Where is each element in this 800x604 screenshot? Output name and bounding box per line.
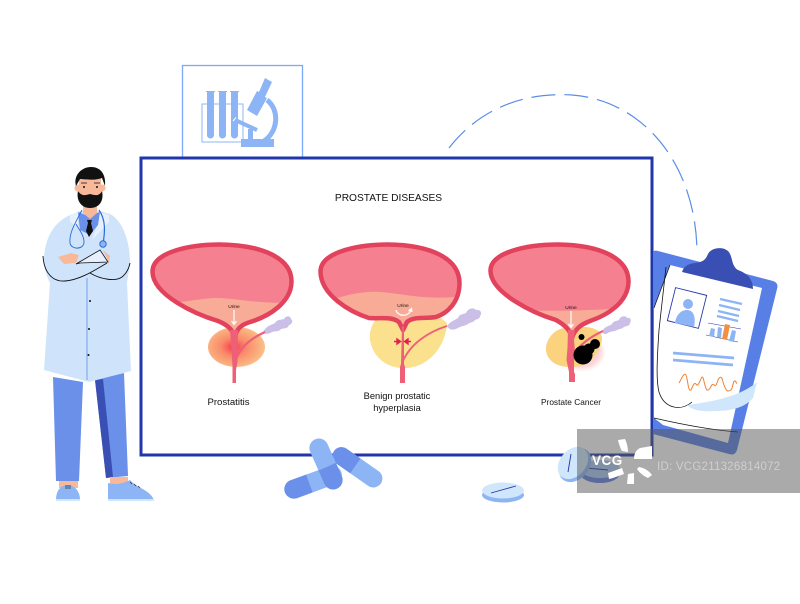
watermark [577, 429, 800, 493]
bladder [152, 244, 292, 338]
bladder [320, 244, 460, 330]
vas deferens smoke [263, 316, 292, 334]
watermark logo [608, 439, 652, 484]
gland [546, 327, 602, 367]
capsule 2 [329, 444, 386, 491]
smoke [447, 308, 481, 330]
urethra [230, 330, 238, 383]
enlarged gland [370, 314, 447, 368]
trousers [53, 377, 83, 481]
clipboard [653, 248, 778, 454]
paper [654, 265, 762, 443]
buttons [88, 301, 90, 355]
watermark: VCG [592, 453, 623, 468]
panel: main board [141, 158, 652, 455]
coat [44, 211, 131, 382]
panel: prostate cancer [490, 244, 640, 407]
face [74, 184, 82, 192]
bladder [490, 244, 629, 338]
tablet lying [580, 463, 620, 483]
capsule 1 [282, 463, 345, 501]
trouser shade [95, 379, 113, 478]
collar [70, 212, 109, 240]
urine label: Urine [397, 303, 409, 309]
watermark: ID: VCG211326814072 [657, 461, 780, 473]
crossed arms [44, 250, 107, 282]
cancer glow [558, 332, 606, 372]
beard [78, 191, 102, 208]
label: Prostate Cancer [541, 397, 601, 407]
prostate gland [208, 327, 265, 367]
panel: benign prostatic hyperplasia [320, 244, 481, 413]
urine label: Urine [565, 305, 577, 311]
panel: benign prostatic hyperplasia: hyperplasia [373, 403, 422, 413]
title: PROSTATE DISEASES [335, 193, 442, 204]
dashed arc [449, 95, 697, 250]
fold [687, 382, 757, 411]
stethoscope [70, 210, 84, 248]
portrait [667, 288, 707, 328]
shirt and tie [78, 212, 100, 235]
mini bar chart [706, 323, 741, 342]
label: Benign prostatic [364, 391, 431, 401]
label: Prostatitis [207, 397, 250, 408]
orange wave [679, 374, 737, 391]
ankles and shoes [59, 477, 128, 488]
capsule 3 [306, 435, 346, 493]
compression arrows [394, 339, 411, 344]
hair [75, 167, 105, 186]
swirl arrow [396, 308, 412, 315]
doctor [43, 167, 154, 501]
urine label: Urine [228, 304, 240, 310]
urethra [566, 330, 575, 382]
icon: lab microscope and test tubes [182, 66, 302, 158]
arrow [232, 310, 236, 324]
panel: prostatitis [150, 242, 294, 405]
tablet standing [552, 441, 598, 489]
info lines [717, 299, 742, 321]
paper edge line [657, 267, 692, 407]
tablet [482, 488, 524, 502]
tumour [574, 334, 600, 364]
eyes [84, 186, 97, 188]
board [653, 251, 778, 454]
clip [682, 248, 753, 289]
text bars [673, 353, 734, 365]
smoke [602, 316, 631, 334]
urethra [400, 326, 405, 383]
pills [282, 435, 620, 502]
arrow [568, 311, 574, 328]
